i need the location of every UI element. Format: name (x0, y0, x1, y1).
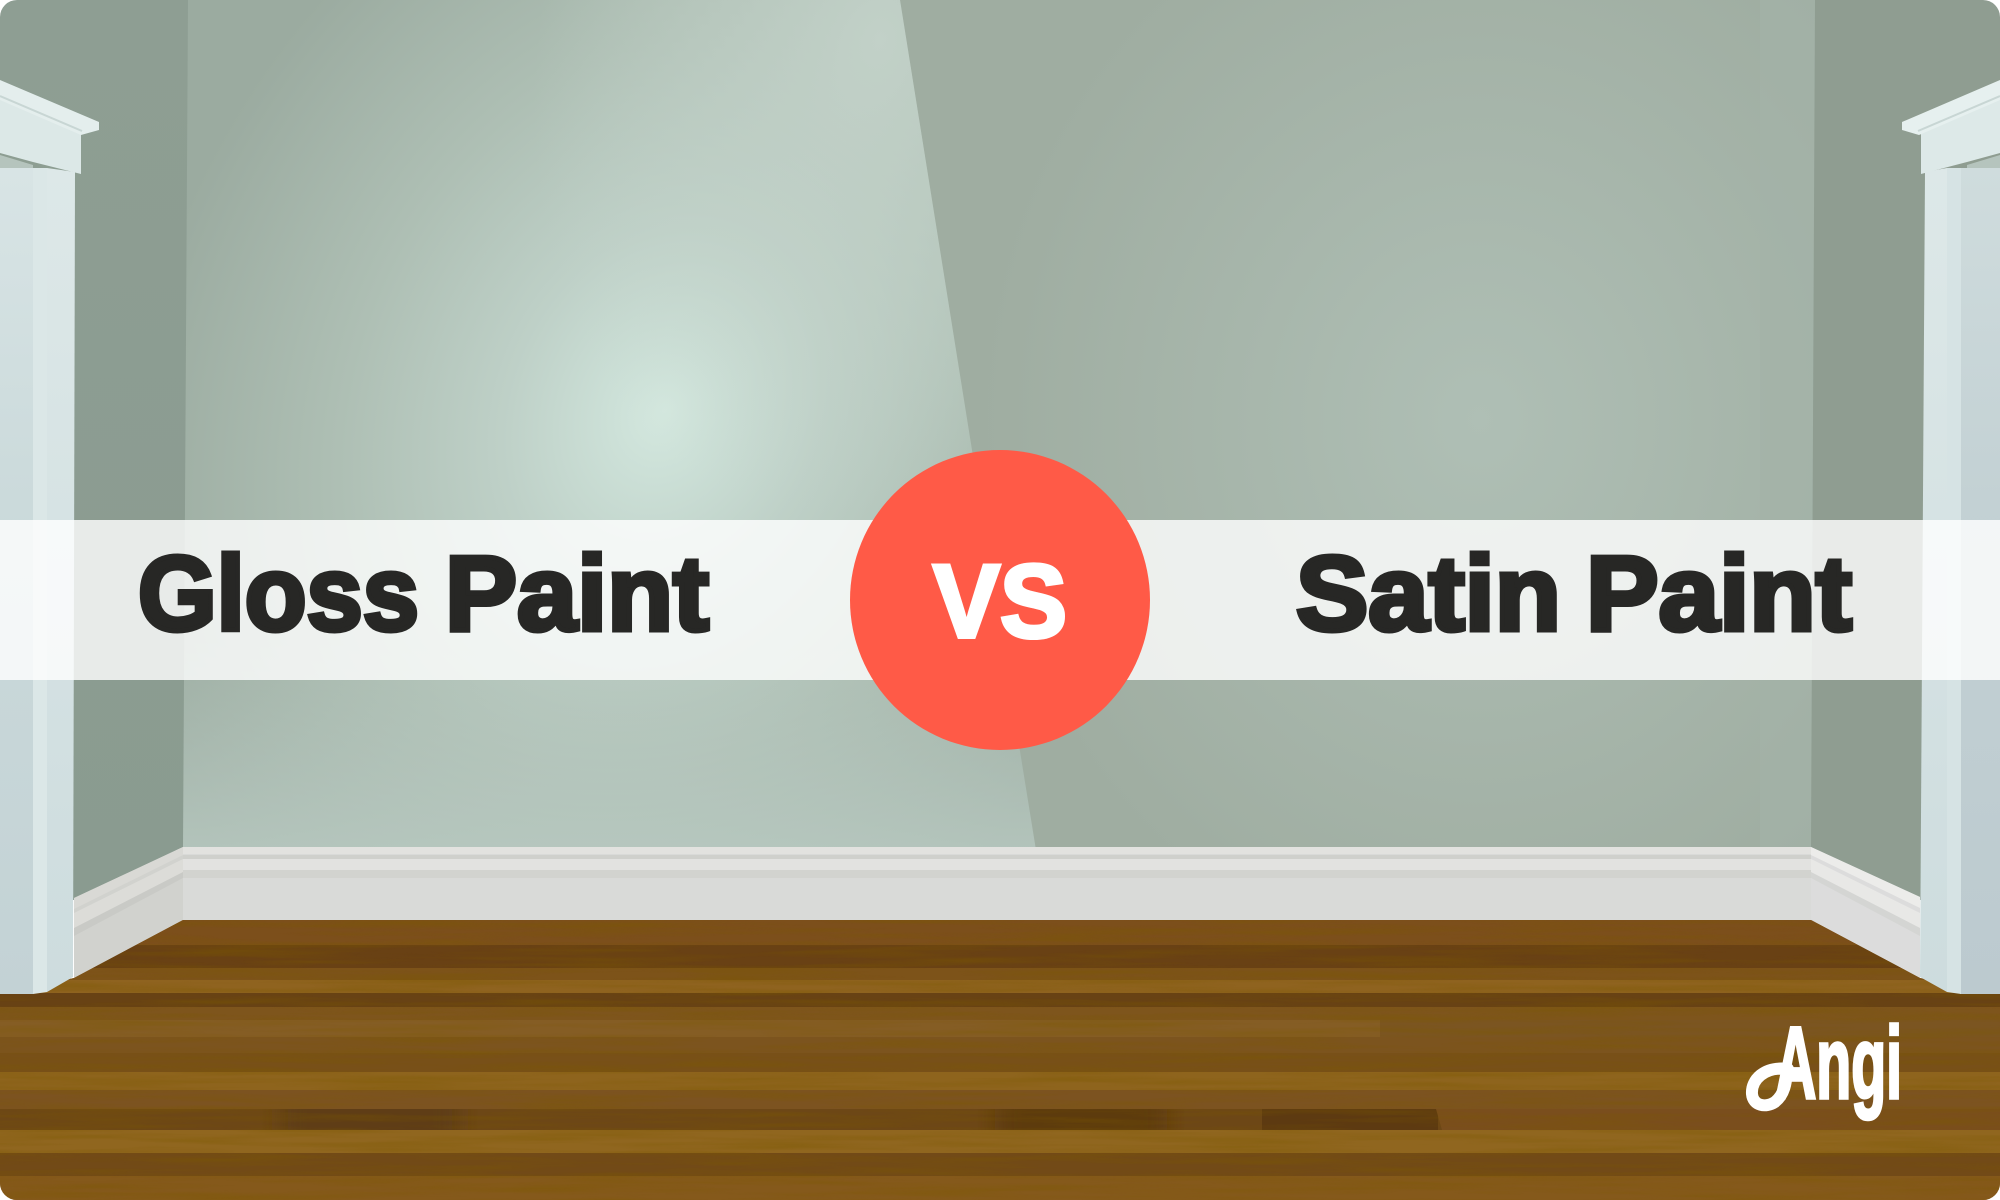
left side wall (0, 0, 188, 900)
right door header (1902, 80, 2000, 174)
baseboard (74, 847, 1920, 978)
logo: Angi: Angi (1775, 1006, 1902, 1120)
right side wall (1811, 0, 2000, 900)
heading: Gloss Paint (140, 550, 710, 634)
heading: Gloss Paint: Paint (445, 535, 709, 653)
title band (0, 520, 2000, 680)
left door header (0, 80, 99, 174)
wood floor (0, 920, 2000, 1200)
right door casing (1902, 80, 2000, 994)
heading: Satin Paint: Satin (1296, 535, 1561, 653)
heading: Satin Paint (1296, 550, 1854, 634)
left door casing (0, 80, 99, 994)
VS badge: VS (933, 544, 1067, 660)
logo: Angi (1746, 1022, 1899, 1122)
heading: Satin Paint: Paint (1586, 535, 1852, 653)
back wall: gloss half with sheen (180, 0, 1036, 850)
VS badge (850, 450, 1150, 750)
back wall: satin half (900, 0, 1815, 847)
heading: Gloss Paint: Gloss (138, 535, 419, 653)
